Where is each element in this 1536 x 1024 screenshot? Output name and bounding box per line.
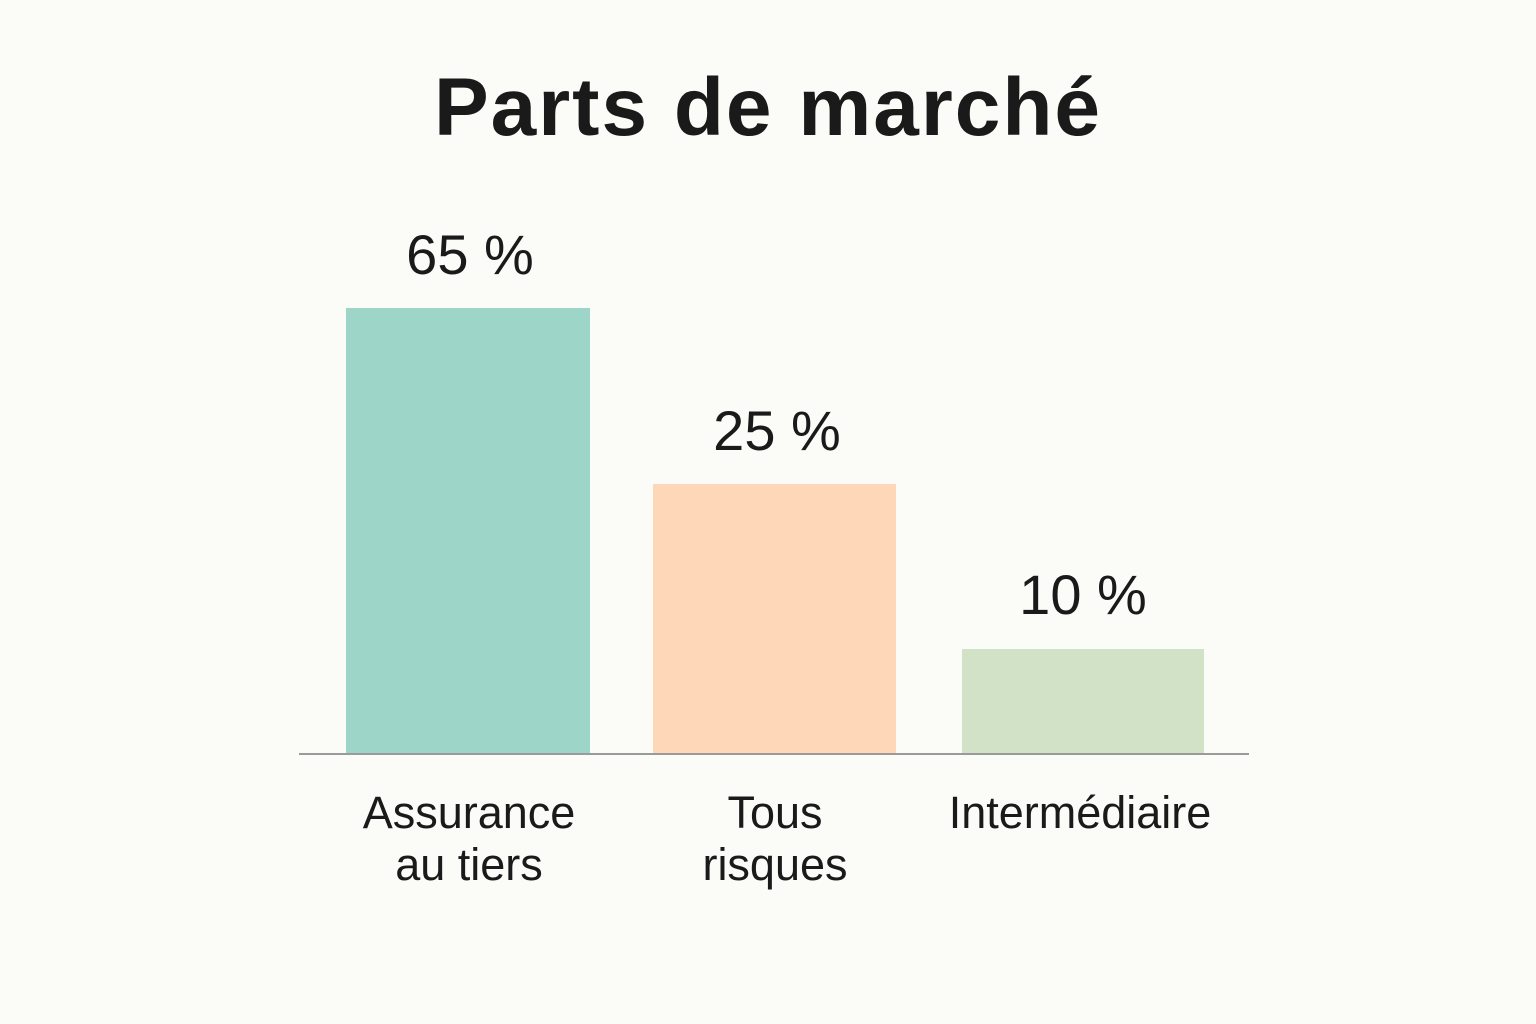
value: 25 %: 25 % — [713, 399, 841, 462]
label: Intermédiaire: Intermédiaire — [949, 787, 1211, 838]
title: Parts de marché — [434, 62, 1102, 153]
bar: Assurance au tiers — [346, 308, 590, 754]
label: Assurance au tiers: au tiers — [395, 839, 543, 890]
label: Tous risques: risques — [702, 839, 848, 890]
value: 10 %: 10 % — [1019, 563, 1147, 626]
label: Tous risques: Tous — [727, 787, 823, 838]
value: 65 %: 65 % — [406, 223, 534, 286]
label: Assurance au tiers: Assurance — [363, 787, 575, 838]
bar chart — [299, 223, 1249, 890]
label: Assurance au tiers — [362, 787, 575, 890]
bar: Tous risques — [653, 484, 896, 754]
bar: Intermédiaire — [962, 649, 1204, 754]
label: Tous risques — [702, 787, 848, 890]
